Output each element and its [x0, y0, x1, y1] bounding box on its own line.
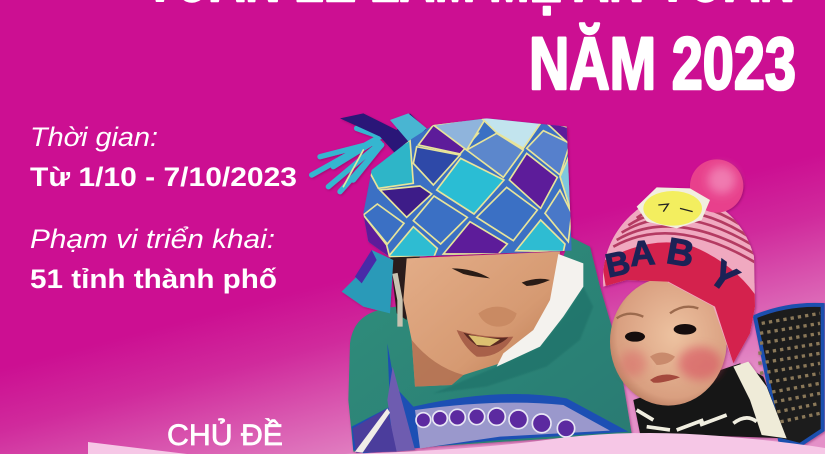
mother's smile [457, 330, 513, 357]
baby's brows [617, 307, 698, 318]
basket on mother's back [755, 305, 823, 445]
title [145, 0, 796, 105]
scarf tassel [312, 128, 382, 192]
white cord [355, 408, 390, 453]
hat lettering BABY: B [602, 244, 633, 285]
hat lettering BABY: Y [702, 252, 746, 300]
theme label: CHỦ ĐỀ [167, 418, 283, 452]
mother's head scarf [312, 113, 577, 313]
checked scarf body [357, 113, 577, 260]
hat cat face [637, 187, 710, 228]
time label: Thời gian: [30, 122, 158, 152]
baby's cheeks [620, 347, 722, 380]
hat lettering BABY: A [628, 233, 657, 274]
fur collar [497, 254, 583, 367]
embroidered blue sash [352, 343, 628, 453]
baby's clothes [633, 363, 787, 438]
sash vertical strip [387, 367, 415, 452]
mother's nose [478, 307, 517, 327]
scope label: Phạm vi triển khai: [30, 224, 275, 254]
earring [395, 273, 400, 327]
scarf knot [340, 113, 427, 155]
pompom highlight [708, 166, 736, 194]
sash lower-left panel [353, 408, 397, 453]
bottom light banner [88, 433, 825, 454]
baby [597, 159, 787, 438]
info text block [30, 122, 297, 294]
time value: Từ 1/10 - 7/10/2023 [30, 162, 297, 192]
baby's eyes [625, 324, 696, 342]
hat lettering BABY: B [664, 229, 698, 275]
hat pompom [690, 159, 743, 213]
scope value: 51 tỉnh thành phố [30, 264, 277, 294]
baby's knit hat [603, 209, 757, 364]
photo: mother and child [312, 113, 823, 453]
jacket fold shading [433, 287, 593, 393]
neck shadow [412, 340, 463, 387]
mother's jacket [348, 237, 632, 452]
baby's face [610, 278, 727, 406]
hat lettering BABY [602, 229, 746, 300]
mother's face [390, 252, 583, 387]
baby's nose and mouth [650, 352, 675, 365]
mother's eyes [452, 268, 550, 286]
hair tuft [342, 250, 393, 313]
hair under scarf [390, 257, 420, 320]
